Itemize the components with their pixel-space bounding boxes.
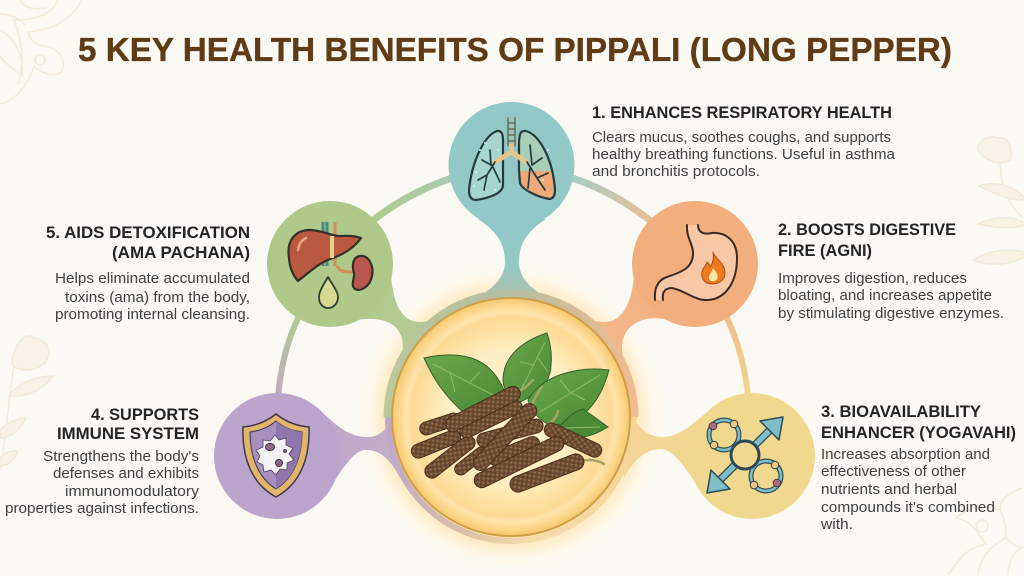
text block: benefit 5: (AMA PACHANA) [112, 244, 250, 262]
panel: digestive circle [632, 201, 758, 327]
icon: shield with pathogen [243, 414, 309, 497]
panel: central pippali image [392, 298, 630, 536]
band around disc, upper half [388, 294, 634, 417]
text block: benefit 2: bloating, and increases appetite [778, 287, 992, 304]
text block: benefit 3: Increases absorption and [821, 446, 990, 463]
panel: bioavailability circle [689, 393, 815, 519]
text block: benefit 5: promoting internal cleansing. [55, 306, 250, 323]
decoration: bottom-right mandala [948, 488, 1023, 575]
text block: benefit 3: 3. BIOAVAILABILITY [821, 403, 981, 421]
text block: benefit 3: effectiveness of other [821, 463, 966, 480]
icon: flame [702, 252, 725, 284]
arc: detox to respiratory [372, 178, 452, 221]
text block: benefit 4 [5, 406, 200, 517]
text block: benefit 1: Clears mucus, soothes coughs, and supports [592, 129, 891, 146]
panel: immune circle [214, 393, 340, 519]
icon: stomach [655, 225, 737, 300]
long pepper spikes [409, 384, 604, 494]
icon: liver, kidney and drop [288, 222, 372, 308]
text block: benefit 1: and bronchitis protocols. [592, 163, 760, 180]
neck: digestive to center [566, 276, 669, 400]
text block: benefit 2: by stimulating digestive enzymes. [778, 305, 1004, 322]
text block: benefit 3 [820, 403, 1016, 533]
text block: benefit 2: Improves digestion, reduces [778, 270, 967, 287]
text block: benefit 3: nutrients and herbal [821, 481, 957, 498]
arc: digestive to bioavailability [727, 318, 748, 396]
arc: respiratory to digestive [572, 178, 652, 222]
text block: benefit 1: 1. ENHANCES RESPIRATORY HEALTH [592, 104, 892, 122]
text block: benefit 5: Helps eliminate accumulated [55, 270, 250, 287]
icon: synergy arrows [707, 417, 783, 493]
text block: benefit 2 [778, 221, 1004, 322]
text block: benefit 4: Strengthens the body's [43, 448, 199, 465]
panel: detox circle [267, 201, 393, 327]
text block: benefit 2: 2. BOOSTS DIGESTIVE [778, 221, 956, 239]
text block: benefit 4: 4. SUPPORTS [91, 406, 199, 424]
text block: benefit 3: with. [820, 516, 853, 533]
text block: benefit 5 [46, 224, 250, 323]
panel: respiratory circle [448, 102, 574, 228]
green leaves [424, 333, 609, 437]
central glow [353, 259, 669, 575]
text block: benefit 2: FIRE (AGNI) [778, 242, 872, 260]
text block: benefit 5: toxins (ama) from the body, [65, 289, 250, 306]
text block: benefit 3: compounds it's combined [821, 499, 995, 516]
text block: benefit 1 [592, 104, 896, 180]
text block: benefit 1: healthy breathing functions. Useful in asthma [592, 146, 896, 163]
text block: benefit 4: IMMUNE SYSTEM [57, 425, 199, 443]
neck: immune to center [318, 408, 400, 500]
arc: detox to immune [278, 318, 298, 396]
icon: lungs [469, 118, 555, 200]
neck: respiratory to center [468, 219, 556, 302]
decoration: right floral sprig [973, 137, 1023, 264]
text block: benefit 3: ENHANCER (YOGAVAHI) [821, 424, 1016, 442]
neck: detox to center [356, 276, 456, 400]
text block: benefit 4: defenses and exhibits [53, 465, 199, 482]
band around disc, lower half [388, 417, 634, 541]
golden disc [392, 298, 630, 536]
long pepper spike stems [516, 380, 604, 464]
text block: benefit 4: immunomodulatory [65, 483, 200, 500]
decoration: top-left mandala [0, 0, 82, 104]
decoration: left floral sprig [0, 336, 53, 470]
neck: bioavailability to center [624, 408, 712, 500]
text block: benefit 5: 5. AIDS DETOXIFICATION [46, 224, 250, 242]
connector network [278, 178, 748, 541]
text block: benefit 4: properties against infections. [5, 500, 199, 517]
title: 5 KEY HEALTH BENEFITS OF PIPPALI (LONG PEPPER) [78, 32, 952, 69]
